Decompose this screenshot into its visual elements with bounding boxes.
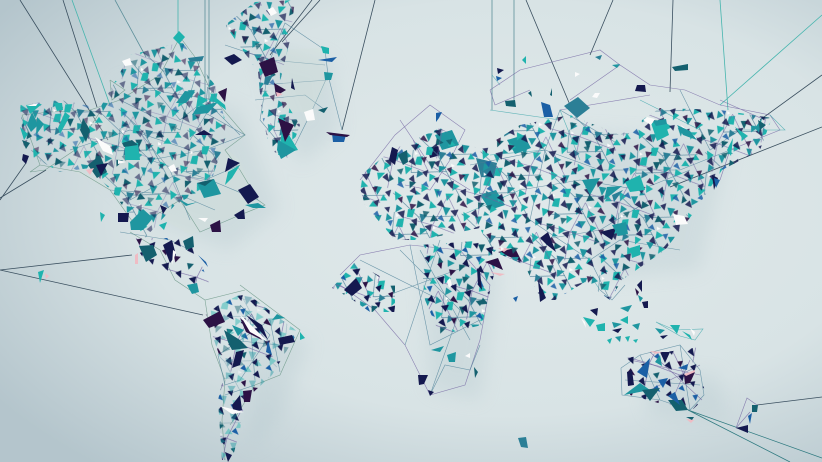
wire mesh [656, 322, 703, 340]
Central and South America [38, 232, 305, 462]
shards [259, 57, 278, 77]
wire mesh [621, 345, 704, 410]
dense shard texture [20, 42, 226, 238]
wire mesh [22, 37, 265, 232]
Australia [620, 345, 758, 433]
wire mesh [130, 232, 300, 460]
Europe and Africa [330, 56, 560, 448]
wire mesh [225, 23, 342, 150]
Indonesia and New Guinea [581, 280, 703, 344]
wire mesh [490, 50, 780, 180]
shards [564, 97, 590, 118]
wire mesh [340, 105, 490, 395]
dense shard texture: eurasia [360, 108, 771, 300]
shards [20, 31, 266, 232]
translucent land pane [60, 110, 258, 235]
shards [476, 158, 497, 178]
dense shard texture: south america [206, 294, 296, 460]
dense shard texture [136, 238, 209, 284]
shards [139, 245, 157, 262]
soft continent shadows [100, 40, 730, 450]
dense shard texture: africa [332, 240, 495, 334]
dense shard texture: australia [626, 348, 704, 409]
Asia [350, 50, 785, 305]
shards [668, 400, 688, 411]
dense shard texture [226, 0, 300, 158]
North America [20, 31, 266, 238]
shards [583, 317, 595, 327]
Greenland [220, 0, 350, 160]
